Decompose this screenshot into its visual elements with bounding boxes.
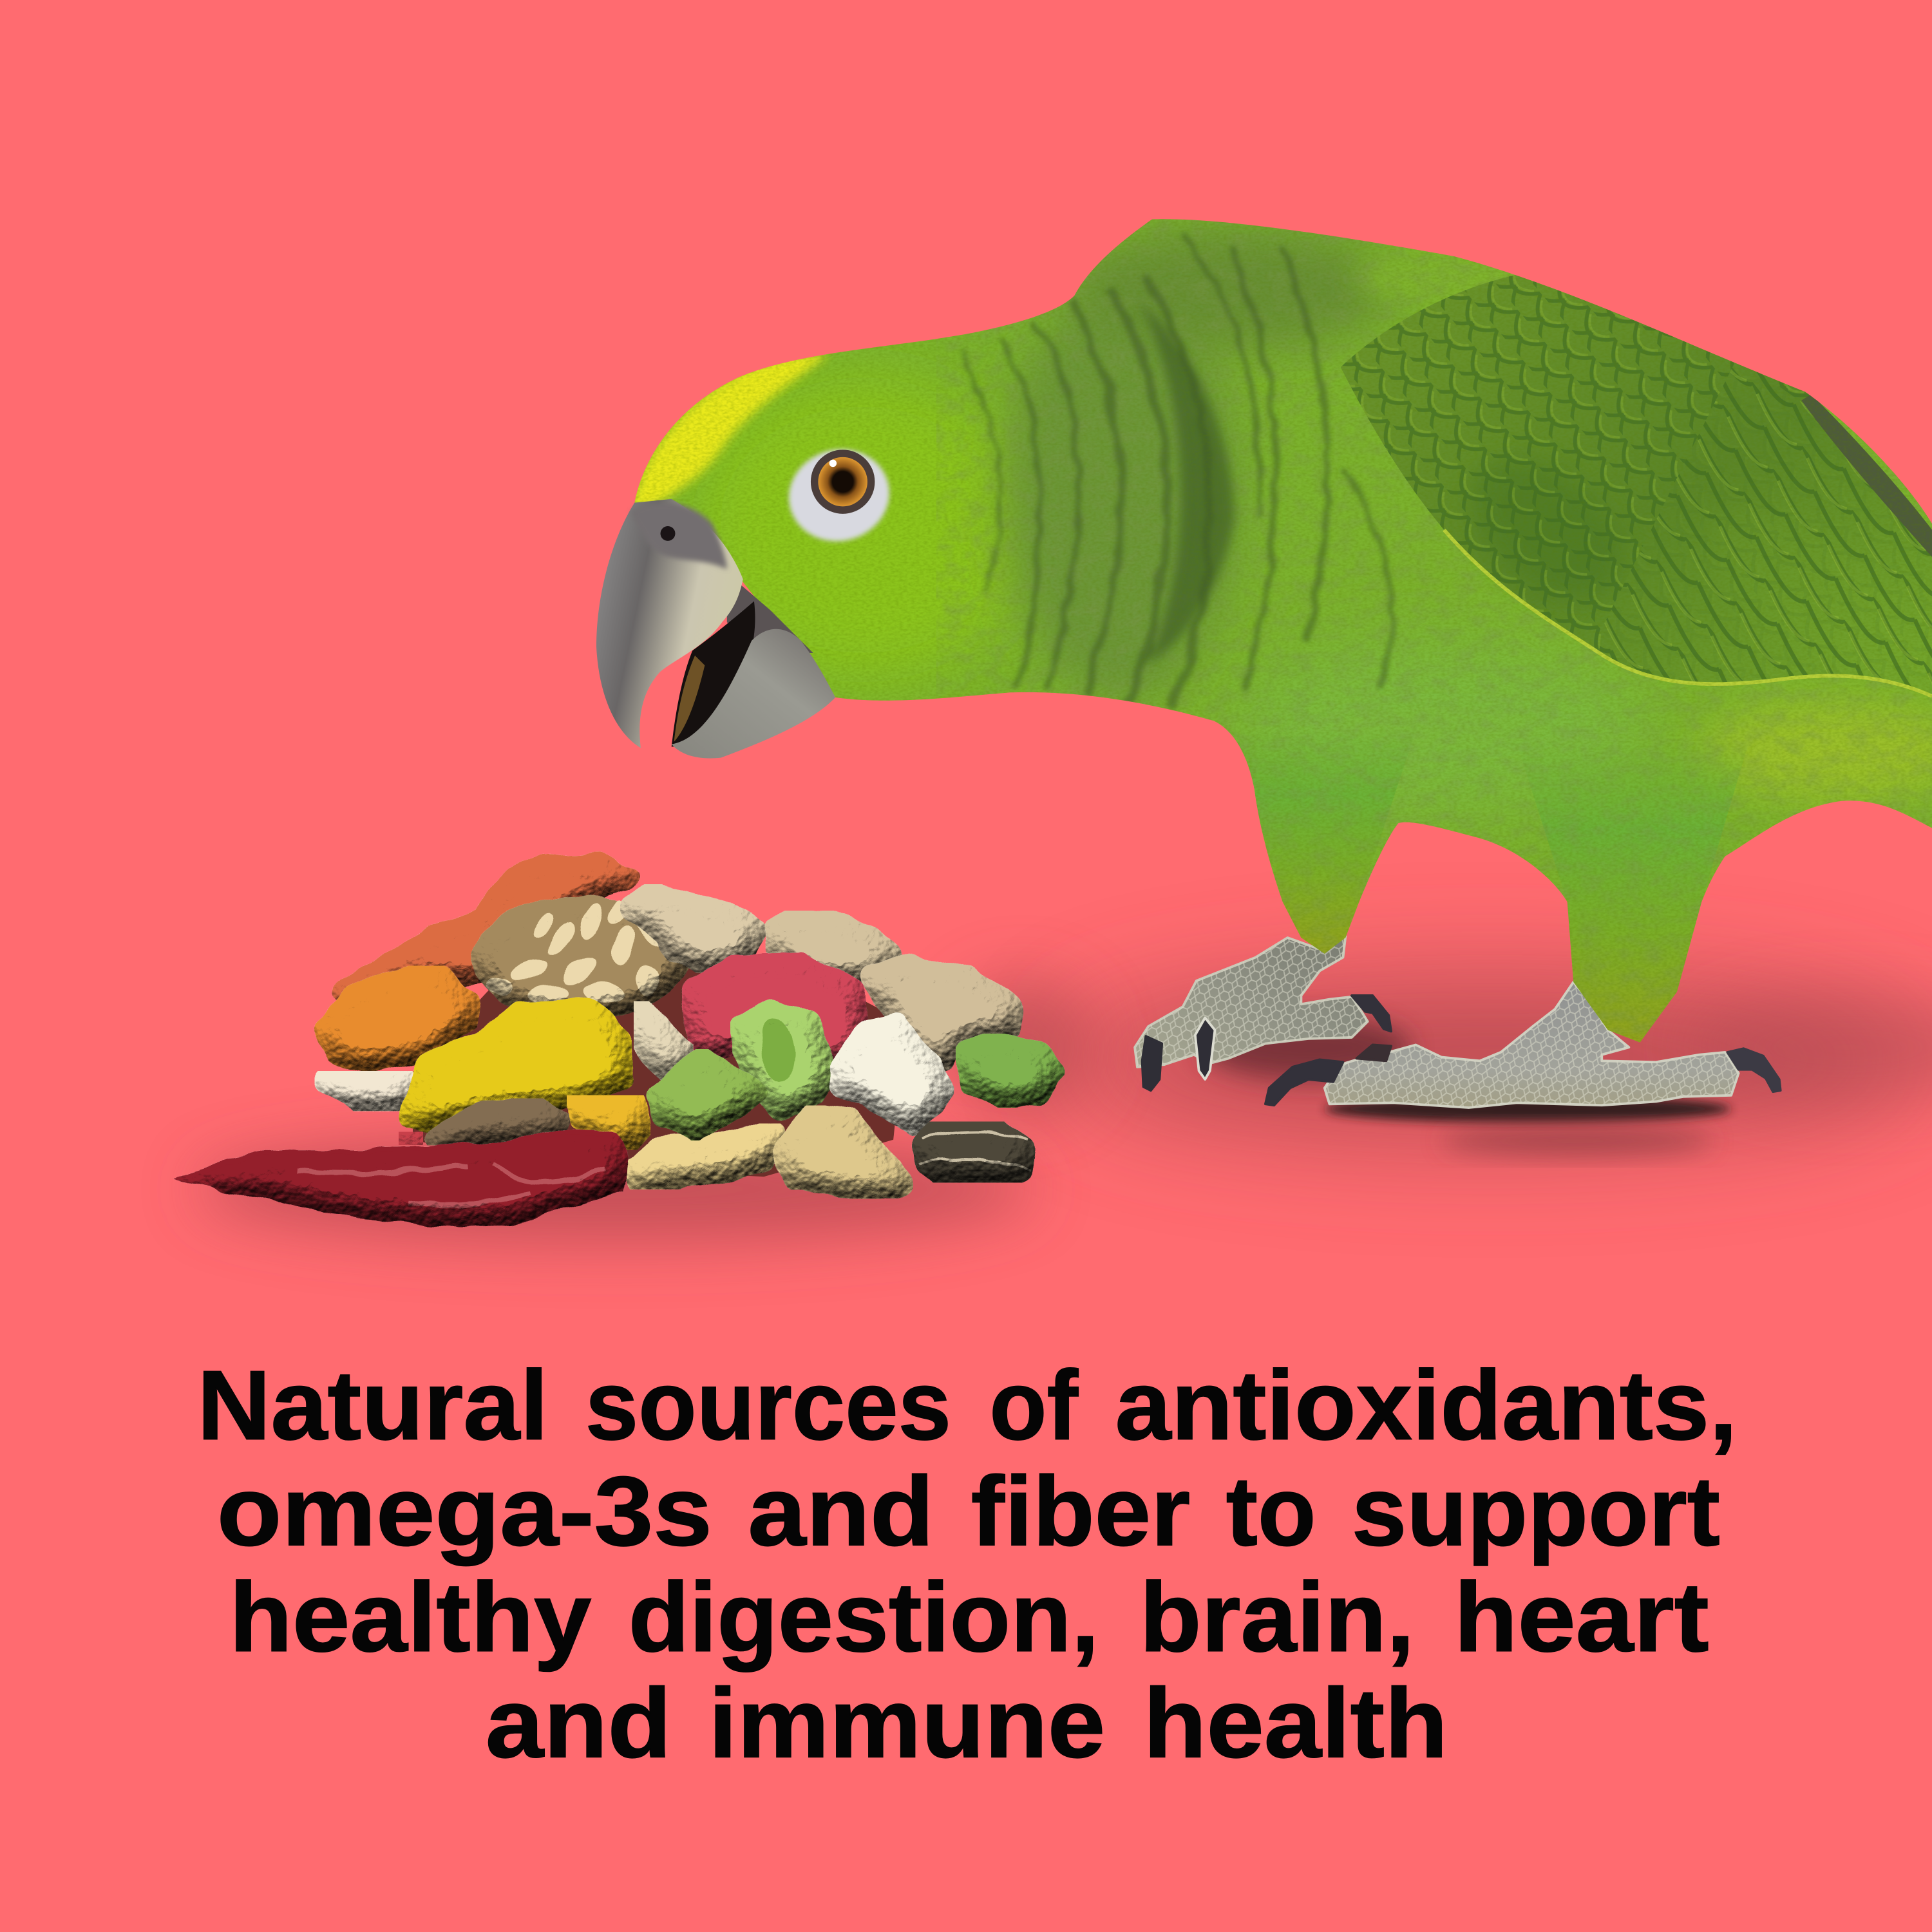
- food: tan biscuit middle: [776, 919, 889, 976]
- claw mid: [1195, 1018, 1215, 1079]
- line 4: [486, 1668, 1448, 1778]
- claw front: [1142, 1036, 1162, 1090]
- claw back: [1357, 1045, 1391, 1061]
- parrot: head colour: [690, 376, 1035, 684]
- claw left: [1265, 1059, 1343, 1105]
- food pile: [182, 864, 1052, 1224]
- parrot: nostril: [661, 526, 675, 541]
- line 2: [217, 1456, 1720, 1566]
- line 4: and: [486, 1668, 672, 1778]
- wing: bright flight feathers: [1683, 479, 1932, 704]
- line 1: sources: [585, 1350, 951, 1461]
- parrot: left foot: [1135, 936, 1391, 1090]
- line 2: support: [1352, 1456, 1720, 1566]
- food: seed cluster: [471, 897, 688, 1020]
- line 2: to: [1226, 1456, 1316, 1566]
- food: red chili: [182, 1133, 627, 1224]
- line 3: [229, 1562, 1709, 1672]
- foot scales: [1135, 936, 1368, 1067]
- parrot: [596, 209, 1932, 1108]
- parrot: neck colour: [1004, 283, 1238, 703]
- parrot: cere: [631, 503, 727, 569]
- food: light green cup: [743, 1010, 826, 1109]
- floor shadow: parrot: [1059, 983, 1932, 1156]
- floor shadow: food: [197, 980, 1097, 1241]
- food: striped sunflower seed: [919, 1129, 1030, 1175]
- parrot: shoulder colour: [1072, 228, 1392, 351]
- parrot: back colour: [1358, 247, 1591, 303]
- line 1: [197, 1350, 1738, 1461]
- foot base: [1325, 982, 1739, 1108]
- food: corn kernel: [576, 1101, 641, 1144]
- parrot: wing: [1341, 274, 1932, 704]
- line 1: of: [989, 1350, 1079, 1461]
- line 4: health: [1144, 1668, 1448, 1778]
- food: tan biscuit top: [631, 895, 754, 962]
- parrot: right foot: [1265, 982, 1781, 1108]
- parrot: dark neck band: [1140, 302, 1235, 665]
- food: potato chunk right: [784, 1116, 900, 1188]
- parrot: body: [634, 219, 1932, 1043]
- claw right: [1352, 996, 1391, 1031]
- line 1: antioxidants,: [1115, 1350, 1738, 1461]
- line 3: digestion,: [629, 1562, 1099, 1672]
- parrot: neck barring: [961, 234, 1392, 708]
- food: white chunk left: [327, 1075, 404, 1106]
- food: green puff right: [969, 1043, 1052, 1099]
- line 3: healthy: [229, 1562, 591, 1672]
- food: green clump: [659, 1059, 754, 1130]
- line 4: immune: [708, 1668, 1105, 1778]
- line 2: omega-3s: [217, 1456, 712, 1566]
- claw right: [1727, 1048, 1781, 1092]
- parrot: rump colour: [1700, 703, 1932, 801]
- food: dried papaya strip: [344, 864, 626, 989]
- line 1: Natural: [197, 1350, 548, 1461]
- parrot: mottling: [936, 209, 1932, 1059]
- food: white puff: [842, 1027, 943, 1124]
- parrot: gape skin: [727, 573, 813, 653]
- line 3: brain,: [1140, 1562, 1414, 1672]
- parrot: mouth interior: [674, 656, 705, 742]
- food: tan biscuit right: [873, 966, 1010, 1059]
- parrot: lower beak: [672, 629, 835, 759]
- wing: dark mid coverts: [1444, 432, 1648, 628]
- parrot: eye: [779, 438, 900, 553]
- food: brown nut: [436, 1104, 560, 1140]
- line 2: and: [748, 1456, 934, 1566]
- headline text: [197, 1350, 1738, 1778]
- parrot: right leg feathers: [1515, 739, 1750, 1043]
- foot scales: [1325, 982, 1739, 1108]
- food: small red piece: [402, 1133, 420, 1144]
- line 3: heart: [1454, 1562, 1709, 1672]
- parrot: upper beak: [596, 499, 743, 748]
- food: yellow cracker: [412, 1010, 621, 1119]
- food: pale triangle chip: [641, 1010, 687, 1072]
- parrot: feather texture: [616, 209, 1932, 1059]
- food: dark base behind pieces: [413, 931, 905, 1177]
- parrot: left leg feathers: [1232, 727, 1417, 954]
- parrot: breast colour: [1232, 641, 1651, 813]
- foot base: [1135, 936, 1368, 1067]
- line 2: fiber: [971, 1456, 1190, 1566]
- parrot: yellow forehead: [631, 354, 828, 511]
- parrot: mouth: [672, 601, 755, 746]
- food: potato chunk: [636, 1131, 770, 1182]
- food: red fruit cube: [695, 965, 855, 1059]
- food: orange crisp: [328, 978, 468, 1061]
